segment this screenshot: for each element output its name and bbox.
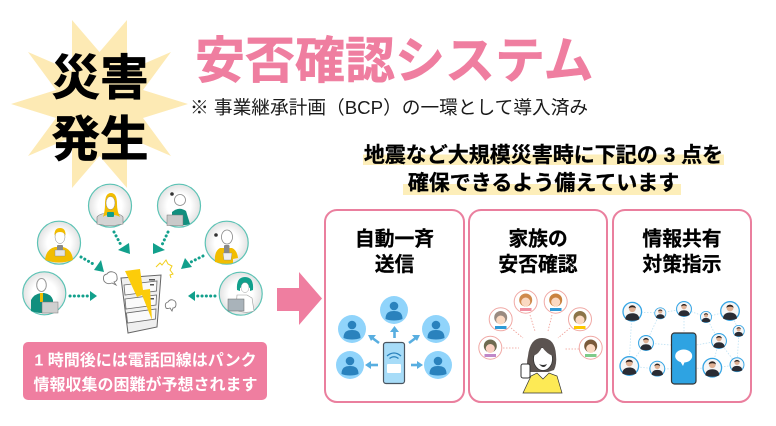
person: man with phone [38, 221, 80, 264]
dotted arrows [70, 232, 215, 296]
smartphone [384, 342, 404, 384]
arrow heads [90, 243, 195, 301]
heading: disaster occurs: 発生 [52, 113, 149, 167]
panel: automatic broadcast [325, 210, 464, 402]
woman with phone [521, 338, 562, 393]
person: woman with laptop [158, 184, 200, 227]
panel heading [498, 228, 578, 276]
headline with highlight: 地震など大規模災害時に下記の 3 点を [364, 144, 723, 167]
smoke clouds [103, 272, 176, 311]
panel heading: 対策指示 [642, 254, 722, 276]
headline with highlight: 確保できるよう備えています [408, 172, 679, 195]
person: elderly man with laptop [23, 272, 66, 315]
panel heading [355, 228, 434, 276]
people photos [620, 302, 744, 377]
panel heading: 送信 [375, 254, 414, 276]
network links [629, 309, 739, 369]
family faces [479, 290, 602, 359]
panel heading: 情報共有 [642, 228, 722, 250]
callout: network congestion: 情報収集の困難が予想されます [33, 375, 258, 394]
dotted connectors [503, 315, 579, 349]
callout: network congestion: 1 時間後には電話回線はパンク [34, 350, 257, 370]
server [121, 269, 161, 333]
person: woman with cup [88, 184, 132, 227]
panel heading: 家族の [508, 228, 568, 250]
callout: network congestion [23, 342, 267, 400]
person: man with phone, right [205, 221, 248, 264]
title: 安否確認システム [195, 33, 594, 89]
subtitle note: ※ 事業継承計画（BCP）の一環として導入済み [190, 97, 588, 118]
headline with highlight [363, 144, 724, 195]
panel heading: 自動一斉 [355, 228, 434, 250]
heading: disaster occurs [52, 52, 149, 167]
blue arrows [369, 329, 420, 365]
panel heading [642, 228, 722, 276]
person icons [336, 296, 452, 379]
panel: family safety [469, 210, 607, 402]
heading: disaster occurs: 災害 [52, 52, 149, 106]
illustration: people calling a congested server [23, 184, 262, 333]
starburst [11, 20, 188, 188]
smartphone with chat bubble [672, 333, 696, 384]
spark [156, 260, 173, 278]
arrow [277, 272, 322, 325]
person: woman with tablet [219, 272, 262, 315]
panel heading: 安否確認 [498, 254, 578, 276]
panel: information sharing [613, 210, 751, 402]
